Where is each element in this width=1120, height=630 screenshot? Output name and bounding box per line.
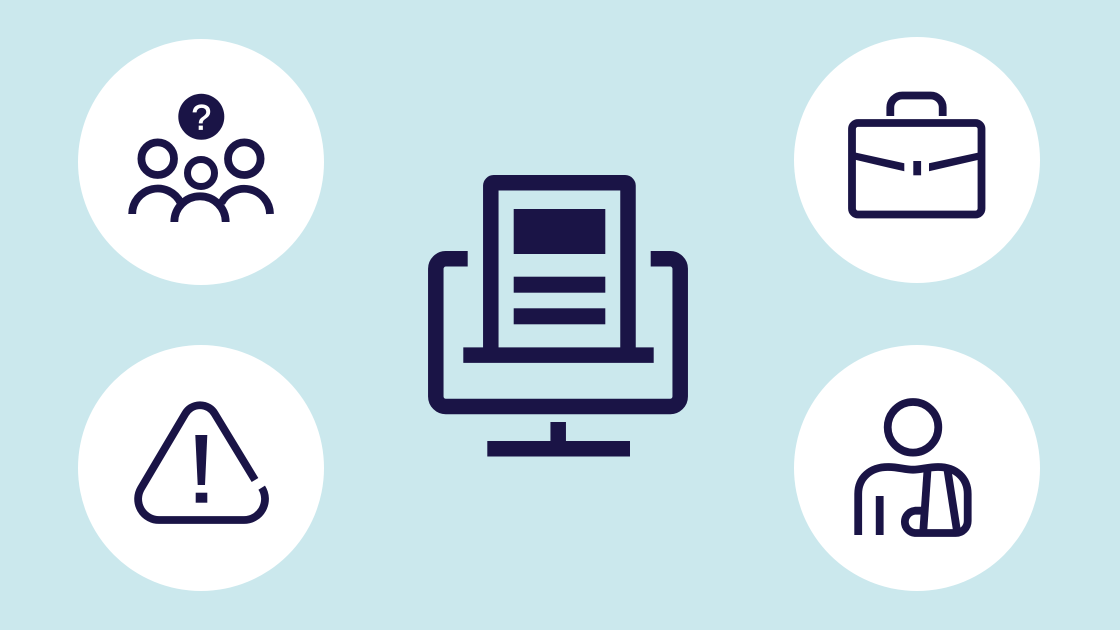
icon: warning triangle: [138, 405, 265, 520]
panel: injured person: [794, 345, 1040, 591]
document line 2: [514, 308, 605, 324]
icon: exclamation mark: [195, 435, 207, 503]
icon: question badge: [178, 94, 224, 140]
icon: question badge: ?: [192, 98, 211, 138]
document image block: [514, 209, 605, 254]
panel: people with question: [78, 39, 324, 285]
icon: group of people: [132, 142, 270, 222]
panel: warning: [78, 345, 324, 591]
icon: person with sling: [858, 402, 968, 535]
icon: computer monitor with document: [436, 183, 680, 449]
icon: briefcase: [852, 96, 982, 214]
monitor frame: [436, 259, 680, 407]
monitor stand: [487, 422, 630, 449]
document line 1: [514, 277, 605, 293]
document outline: [491, 183, 628, 350]
panel: briefcase: [794, 37, 1040, 283]
document base: [463, 347, 654, 363]
